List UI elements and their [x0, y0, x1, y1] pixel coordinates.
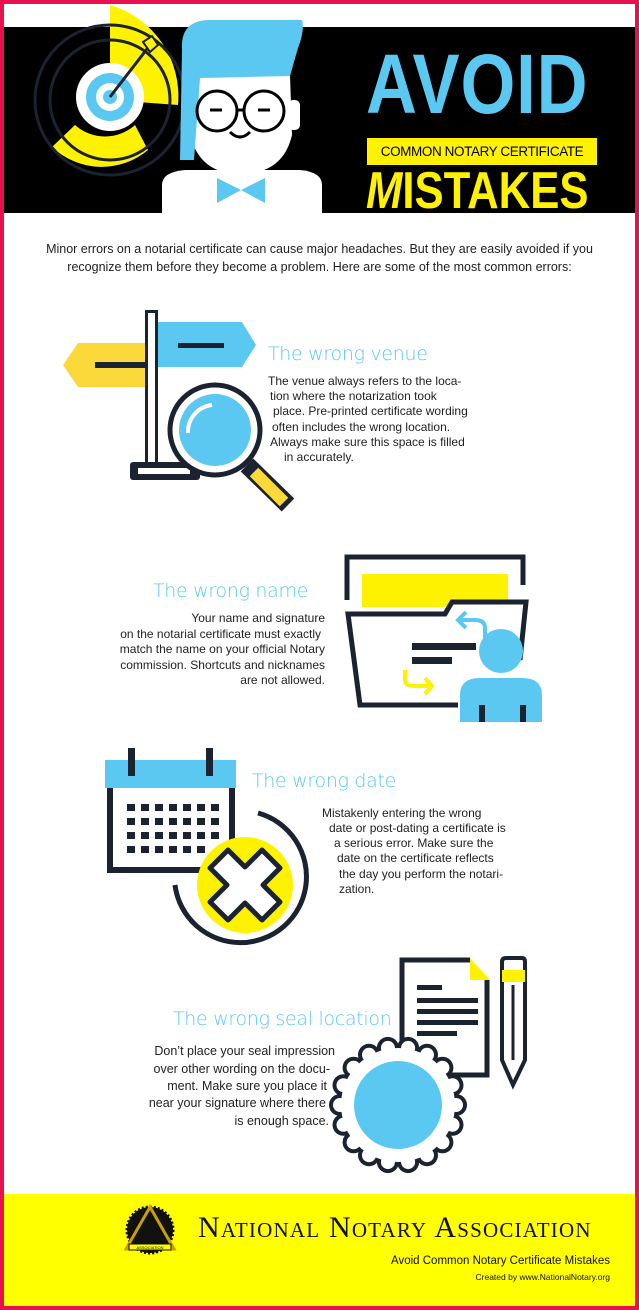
panel: wrong date: the day you perform the notari-: [339, 867, 503, 881]
footer: association name: National Notary Association: [198, 1211, 592, 1244]
icon: association seal logo: [124, 1204, 176, 1254]
icon: folder with person: [344, 554, 542, 722]
text block: The venue always refers to the loca-: [268, 374, 461, 388]
footer: credits: Avoid Common Notary Certificate Mistakes: [391, 1255, 610, 1267]
icon: document, pencil and seal: [329, 956, 527, 1174]
title: [366, 37, 597, 220]
icon: association seal logo: ASSOCIATION: [136, 1245, 164, 1250]
panel: wrong name: commission. Shortcuts and nicknames: [120, 658, 325, 672]
icon: calendar with X: [105, 748, 309, 946]
panel: wrong seal location: [149, 1008, 391, 1128]
panel: wrong date: zation.: [339, 882, 374, 896]
panel: wrong name: [120, 580, 325, 687]
title: MISTAKES: MISTAKES: [366, 162, 588, 220]
footer: credits: Created by www.NationalNotary.org: [476, 1272, 610, 1282]
panel: wrong venue: tion where the notarization took: [270, 389, 437, 403]
footer band: [4, 1194, 635, 1306]
text block: Your name and signature: [191, 611, 325, 625]
panel: wrong seal location: is enough space.: [234, 1114, 329, 1128]
heading: The wrong date: [252, 770, 396, 792]
panel: wrong name: on the notarial certificate must exactly: [120, 627, 321, 641]
footer: credits: [391, 1255, 610, 1282]
panel: wrong venue: Always make sure this space is filled: [270, 435, 465, 449]
icon: target: [35, 5, 185, 175]
panel: wrong date: date or post-dating a certificate is: [329, 821, 506, 835]
panel: wrong seal location: near your signature where there: [149, 1096, 326, 1110]
text block: Don’t place your seal impression: [154, 1044, 335, 1058]
text block: Mistakenly entering the wrong: [322, 806, 481, 820]
panel: wrong venue: in accurately.: [284, 450, 354, 464]
title: AVOID: AVOID: [366, 37, 588, 131]
heading: The wrong seal location: [173, 1008, 391, 1030]
icon: man: [162, 20, 322, 220]
panel: wrong name: are not allowed.: [240, 673, 325, 687]
panel: wrong date: date on the certificate reflects: [337, 851, 494, 865]
panel: wrong venue: often includes the wrong location.: [272, 420, 450, 434]
heading: The wrong venue: [268, 343, 428, 365]
header band: [4, 27, 635, 213]
intro text: Minor errors on a notarial certificate can cause major headaches. But they are easily avoided if you recognize them before they become a problem. Here are some of the most common errors:: [46, 242, 593, 274]
illustration: target and man: [34, 5, 322, 213]
panel: wrong date: [252, 770, 506, 896]
subtitle banner: [367, 138, 597, 165]
panel: wrong name: match the name on your official Notary: [120, 642, 325, 656]
subtitle banner: COMMON NOTARY CERTIFICATE: [381, 144, 583, 159]
panel: wrong date: a serious error. Make sure the: [334, 836, 493, 850]
panel: wrong seal location: over other wording on the docu-: [154, 1062, 330, 1076]
heading: The wrong name: [153, 580, 308, 602]
icon: signpost with magnifier: [63, 310, 294, 512]
panel: wrong venue: [268, 343, 468, 464]
panel: wrong seal location: ment. Make sure you place it: [167, 1079, 327, 1093]
panel: wrong venue: place. Pre-printed certificate wording: [273, 404, 468, 418]
